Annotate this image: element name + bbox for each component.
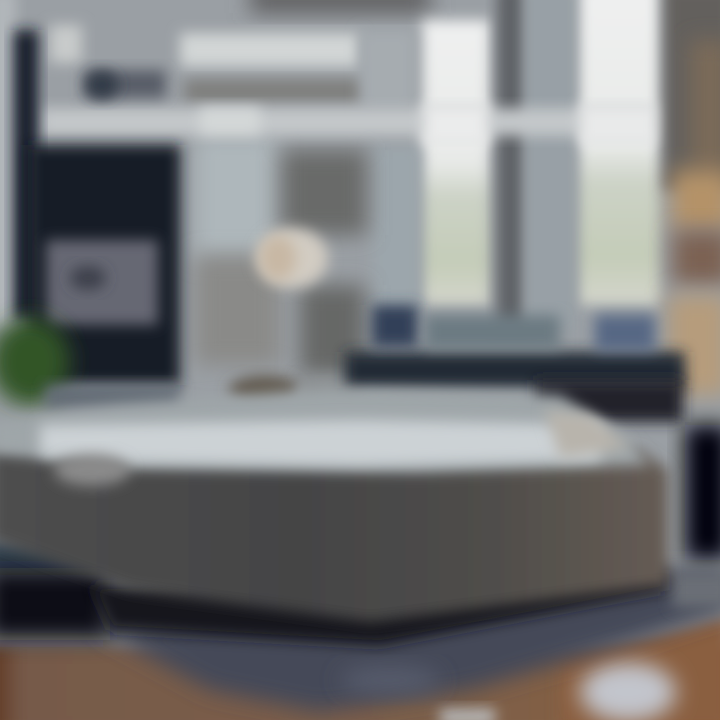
bed base shadow [90, 570, 665, 645]
bright window sections [200, 105, 658, 145]
navy panel [28, 145, 180, 385]
window cross bar [40, 108, 660, 136]
windows [422, 0, 660, 305]
navy sofa [345, 305, 685, 422]
rug [90, 570, 720, 712]
wood floor [0, 645, 720, 720]
dark corner right [685, 425, 720, 560]
dark logo band [84, 70, 166, 99]
navy stool [0, 540, 110, 640]
mattress side [0, 450, 668, 622]
lamp [256, 228, 328, 288]
right wall and wood panel [664, 0, 720, 395]
mattress top [0, 388, 650, 486]
nightstand shelf [45, 376, 360, 410]
dark navy side post [14, 30, 38, 320]
curtains [195, 0, 575, 375]
plant [0, 318, 70, 406]
floor reflections [440, 662, 676, 720]
floor right patch [560, 615, 720, 720]
